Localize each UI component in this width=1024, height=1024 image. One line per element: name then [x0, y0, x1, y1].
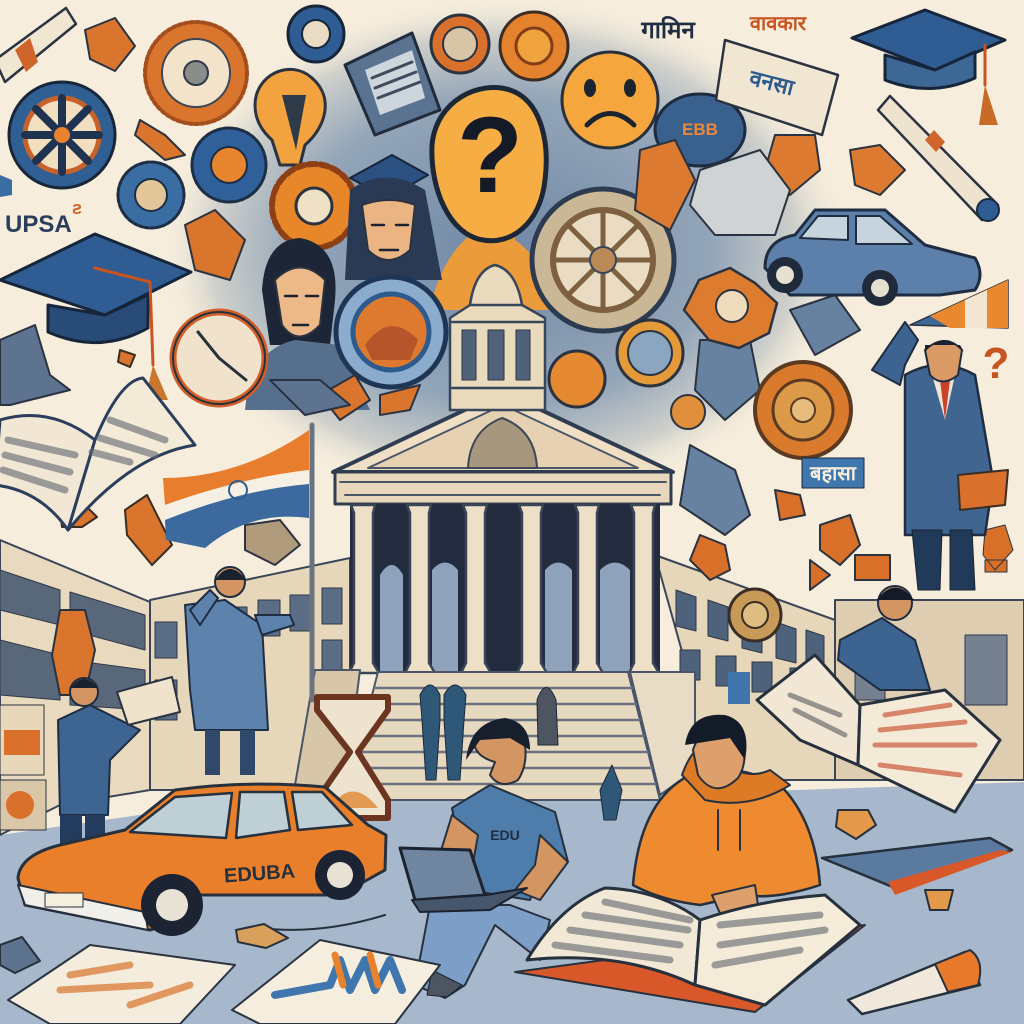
document panel	[345, 33, 440, 135]
indian flag	[163, 425, 312, 700]
sad face	[562, 52, 658, 148]
compass wheel left	[9, 82, 115, 188]
scroll top left	[0, 8, 76, 82]
collage fragments left	[0, 18, 420, 565]
question mark small: ?	[983, 339, 1009, 388]
small badges top	[288, 6, 568, 80]
question mark head: ?	[457, 94, 523, 215]
label: hindi right: बहासा	[809, 463, 857, 485]
papers with bar chart	[8, 940, 440, 1024]
orange sculpture on wall	[52, 610, 95, 695]
left campus building	[0, 540, 350, 835]
paper sign: top right hindi: गामिन	[640, 16, 696, 44]
floor scraps and cable	[0, 765, 622, 973]
graduation cap top left	[0, 234, 191, 400]
steps	[345, 672, 660, 800]
blue car top right	[765, 210, 980, 306]
collage fragments right	[549, 135, 1013, 590]
central government building	[295, 392, 695, 800]
UPSA label: UPSA	[5, 211, 72, 238]
blue emblem with label	[655, 94, 745, 166]
UPSA label	[5, 198, 82, 238]
student with laptop	[400, 718, 568, 998]
floor	[0, 782, 1024, 1024]
UPSA label: ƨ	[72, 198, 82, 218]
blue emblem with label: EBB	[682, 120, 718, 139]
orange car: EDUBA	[223, 861, 296, 887]
student in orange hoodie	[633, 715, 820, 918]
scroll right	[878, 96, 999, 221]
hourglass	[317, 697, 388, 818]
banner flag right	[910, 280, 1008, 328]
left posters	[0, 705, 46, 830]
large open book front	[515, 888, 865, 1012]
marker pen	[848, 950, 980, 1014]
coin badge	[336, 277, 446, 387]
portrait: woman left	[245, 238, 370, 410]
light bulb icon	[255, 69, 325, 165]
portrait: woman centre	[345, 178, 442, 280]
ashoka wheel	[532, 189, 674, 331]
paper sign: top right hindi: वनसा	[746, 65, 798, 101]
graduation cap centre	[350, 155, 428, 198]
sunflower badge	[272, 164, 356, 248]
orange gold medallion	[755, 362, 851, 458]
student with laptop: EDU	[490, 827, 520, 843]
paper sign: top right hindi: वावकार	[749, 13, 807, 35]
open book left	[0, 378, 195, 530]
columns	[349, 505, 659, 673]
orange car	[18, 784, 386, 936]
blue gear badges left	[118, 128, 266, 228]
orange gear badge	[145, 22, 247, 124]
people on steps	[420, 685, 466, 780]
clock	[173, 312, 265, 404]
pediment	[333, 392, 673, 472]
notebook on floor right	[822, 810, 1012, 910]
label: hindi right	[802, 458, 864, 488]
open book right with man	[757, 586, 1000, 812]
dome tower	[450, 265, 545, 410]
question mark head	[430, 87, 550, 310]
medallion by building	[729, 589, 781, 641]
graduation cap top right	[852, 10, 1005, 125]
man in long robe	[185, 567, 294, 775]
man pointing at sign	[58, 677, 180, 845]
orange flower emblem	[684, 268, 777, 348]
paper sign: top right hindi	[640, 13, 838, 135]
man with folder on pedestal	[872, 322, 1008, 590]
right campus building	[655, 555, 1024, 780]
